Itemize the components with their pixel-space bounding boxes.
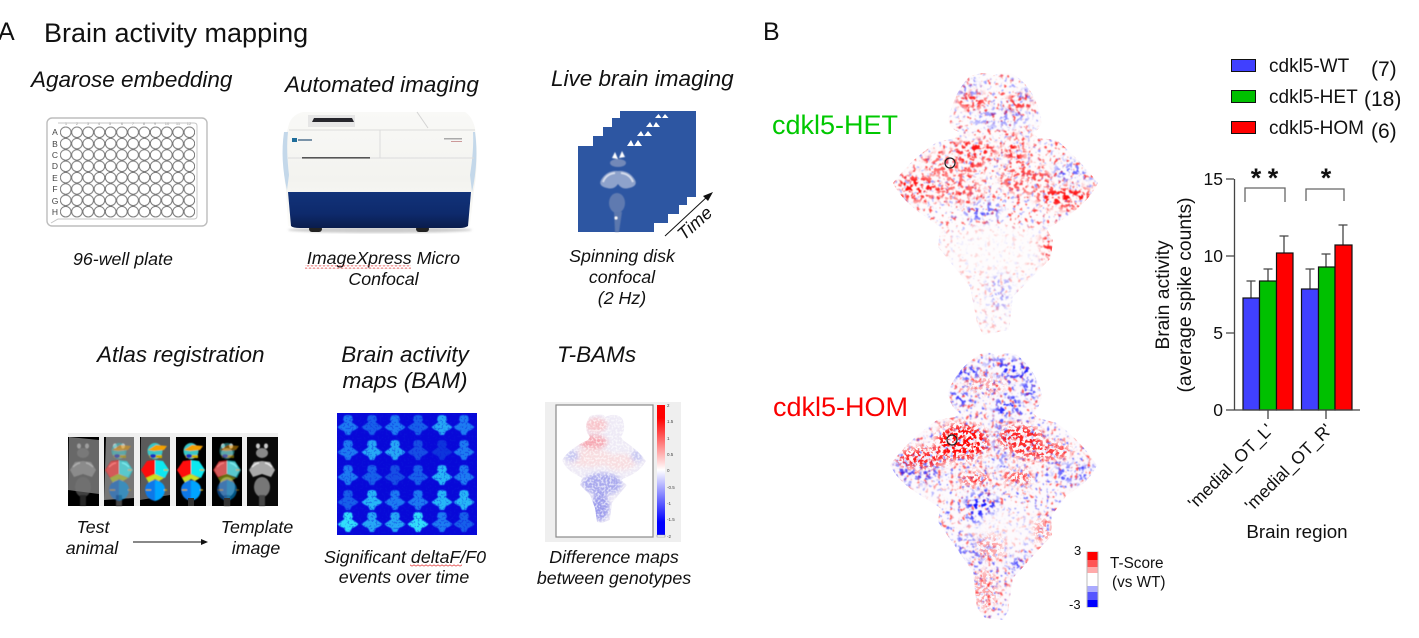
caption: spinning disk confocal: (2 Hz) <box>598 288 646 308</box>
legend item: WT: (7) <box>1371 58 1397 81</box>
legend: T-score colour scale: -3 <box>1069 597 1081 612</box>
y tick labels: 0 <box>1213 400 1223 420</box>
legend: T-score colour scale: 3 <box>1074 543 1081 558</box>
icon: 96-well plate: 10 <box>165 121 170 126</box>
frame 4 <box>176 437 206 506</box>
x axis title: Brain region <box>1246 521 1348 542</box>
caption: spinning disk confocal: confocal <box>589 267 656 287</box>
caption: spinning disk confocal <box>569 246 676 308</box>
label: time: Time <box>673 202 716 244</box>
significance stars: * <box>1268 163 1279 193</box>
caption: significant events <box>324 547 486 587</box>
label: test animal: Test <box>77 517 111 537</box>
y tick labels: 10 <box>1204 246 1223 266</box>
heading: T-BAMs: T-BAMs <box>557 342 636 367</box>
significance stars: * <box>1251 163 1262 193</box>
icon: 96-well plate: 5 <box>109 121 112 126</box>
icon: 96-well plate: G <box>52 196 58 206</box>
legend item: HOM <box>1232 118 1397 143</box>
colour bar <box>657 403 675 539</box>
caption: difference maps: between genotypes <box>537 568 691 588</box>
significance stars: * <box>1321 163 1332 193</box>
heading: brain activity maps: Brain activity <box>341 342 471 367</box>
caption: imaging instrument: ImageXpress Micro <box>307 248 460 268</box>
colour bar: 1.5 <box>667 419 674 424</box>
frame 2 <box>104 437 134 506</box>
colour bar: 0 <box>667 468 670 473</box>
brain fluorescence image <box>600 151 636 232</box>
caption: significant events: Significant deltaF/F0 <box>324 547 486 567</box>
significance stars <box>1251 163 1332 193</box>
legend: T-score colour scale <box>1069 543 1166 612</box>
caption: difference maps: Difference maps <box>549 547 679 567</box>
icon: 96-well plate: 2 <box>76 121 79 126</box>
bars <box>1243 245 1352 410</box>
legend item: HET <box>1232 87 1401 111</box>
image: atlas registration strip <box>68 433 278 506</box>
map: cdkl5-HET brain <box>893 73 1098 334</box>
colour bar: 1 <box>667 436 670 441</box>
legend item: HOM: (6) <box>1371 120 1397 143</box>
icon: 96-well plate: C <box>52 150 58 160</box>
icon: 96-well plate: 7 <box>132 121 135 126</box>
error bars <box>1246 225 1348 298</box>
heading: brain activity maps <box>341 342 471 393</box>
icon: 96-well plate: A <box>52 127 58 137</box>
arrow: test to template <box>133 539 208 545</box>
label: template image: Template <box>221 517 293 537</box>
y axis title: (average spike counts) <box>1175 197 1196 393</box>
icon: 96-well plate: E <box>52 173 58 183</box>
label: test animal: animal <box>66 538 119 558</box>
frame 6 <box>247 437 278 506</box>
x tick labels: 'medial_OT_R' <box>1241 420 1337 516</box>
legend item: WT <box>1232 56 1397 81</box>
legend item: HET: cdkl5-HET <box>1269 87 1358 108</box>
legend item: HET: (18) <box>1364 88 1401 111</box>
legend: genotypes <box>1232 56 1401 143</box>
caption: imaging instrument <box>305 248 460 289</box>
x tick labels <box>1184 420 1337 516</box>
colour bar: -0.5 <box>667 485 675 490</box>
caption: imaging instrument: Confocal <box>348 269 420 289</box>
caption: 96-well plate: 96-well plate <box>73 249 173 269</box>
y tick labels: 15 <box>1204 169 1223 189</box>
frame 5 <box>212 437 242 506</box>
legend: T-score colour scale: (vs WT) <box>1112 574 1166 591</box>
colour bar: -1 <box>667 501 671 506</box>
label: template image <box>221 517 293 558</box>
icon: 96-well plate: 12 <box>187 121 192 126</box>
map shape <box>562 414 646 523</box>
icon: 96-well plate: 3 <box>87 121 90 126</box>
arrow: time <box>665 192 713 236</box>
caption: significant events: events over time <box>339 567 469 587</box>
icon: 96-well plate: 4 <box>98 121 101 126</box>
map: cdkl5-HOM brain <box>890 352 1096 620</box>
region marker <box>945 158 955 168</box>
y tick labels <box>1204 169 1223 420</box>
legend: T-score colour scale: T-Score <box>1110 555 1164 572</box>
title: Brain activity mapping <box>44 18 308 48</box>
label: cdkl5-HET: cdkl5-HET <box>772 110 898 140</box>
heading: live brain imaging: Live brain imaging <box>551 66 734 91</box>
legend item: HOM: cdkl5-HOM <box>1269 118 1364 139</box>
icon: 96-well plate <box>47 118 207 226</box>
icon: 96-well plate: 1 <box>65 121 68 126</box>
frame 1 <box>68 437 99 506</box>
region marker <box>947 435 957 445</box>
image: imaging instrument <box>283 112 477 233</box>
icon: 96-well plate: D <box>52 161 58 171</box>
legend item: WT: cdkl5-WT <box>1269 56 1350 77</box>
label: template image: image <box>232 538 280 558</box>
y axis title: Brain activity <box>1153 240 1174 350</box>
icon: 96-well plate: 8 <box>143 121 146 126</box>
colour bar: 0.5 <box>667 452 674 457</box>
caption: spinning disk confocal: Spinning disk <box>569 246 676 266</box>
heading: automated imaging: Automated imaging <box>283 72 479 97</box>
image: brain activity map grid <box>337 413 477 535</box>
heading: atlas registration: Atlas registration <box>95 342 265 367</box>
frame 3 <box>140 437 170 506</box>
caption: difference maps <box>537 547 691 588</box>
heading: agarose embedding: Agarose embedding <box>29 67 233 92</box>
icon: 96-well plate: B <box>52 139 58 149</box>
x tick labels: 'medial_OT_L' <box>1184 420 1278 514</box>
bar chart: brain activity by region <box>1153 163 1360 542</box>
icon: 96-well plate: 6 <box>121 121 124 126</box>
label: cdkl5-HOM: cdkl5-HOM <box>773 392 908 422</box>
label: test animal <box>66 517 119 558</box>
icon: 96-well plate: H <box>52 207 58 217</box>
colour bar: -2 <box>667 534 671 539</box>
axes <box>1226 179 1360 419</box>
y axis title <box>1153 197 1196 393</box>
colour bar: 2 <box>667 403 670 408</box>
image: time-lapse frame stack <box>578 111 696 232</box>
y tick labels: 5 <box>1213 323 1223 343</box>
icon: 96-well plate: F <box>52 184 58 194</box>
colour bar: -1.5 <box>667 517 675 522</box>
icon: 96-well plate: 9 <box>154 121 157 126</box>
heading: brain activity maps: maps (BAM) <box>342 368 468 393</box>
image: T-BAM difference map <box>545 402 681 542</box>
significance brackets <box>1245 188 1344 202</box>
panel letter B: B <box>763 18 780 46</box>
icon: 96-well plate: 11 <box>176 121 181 126</box>
